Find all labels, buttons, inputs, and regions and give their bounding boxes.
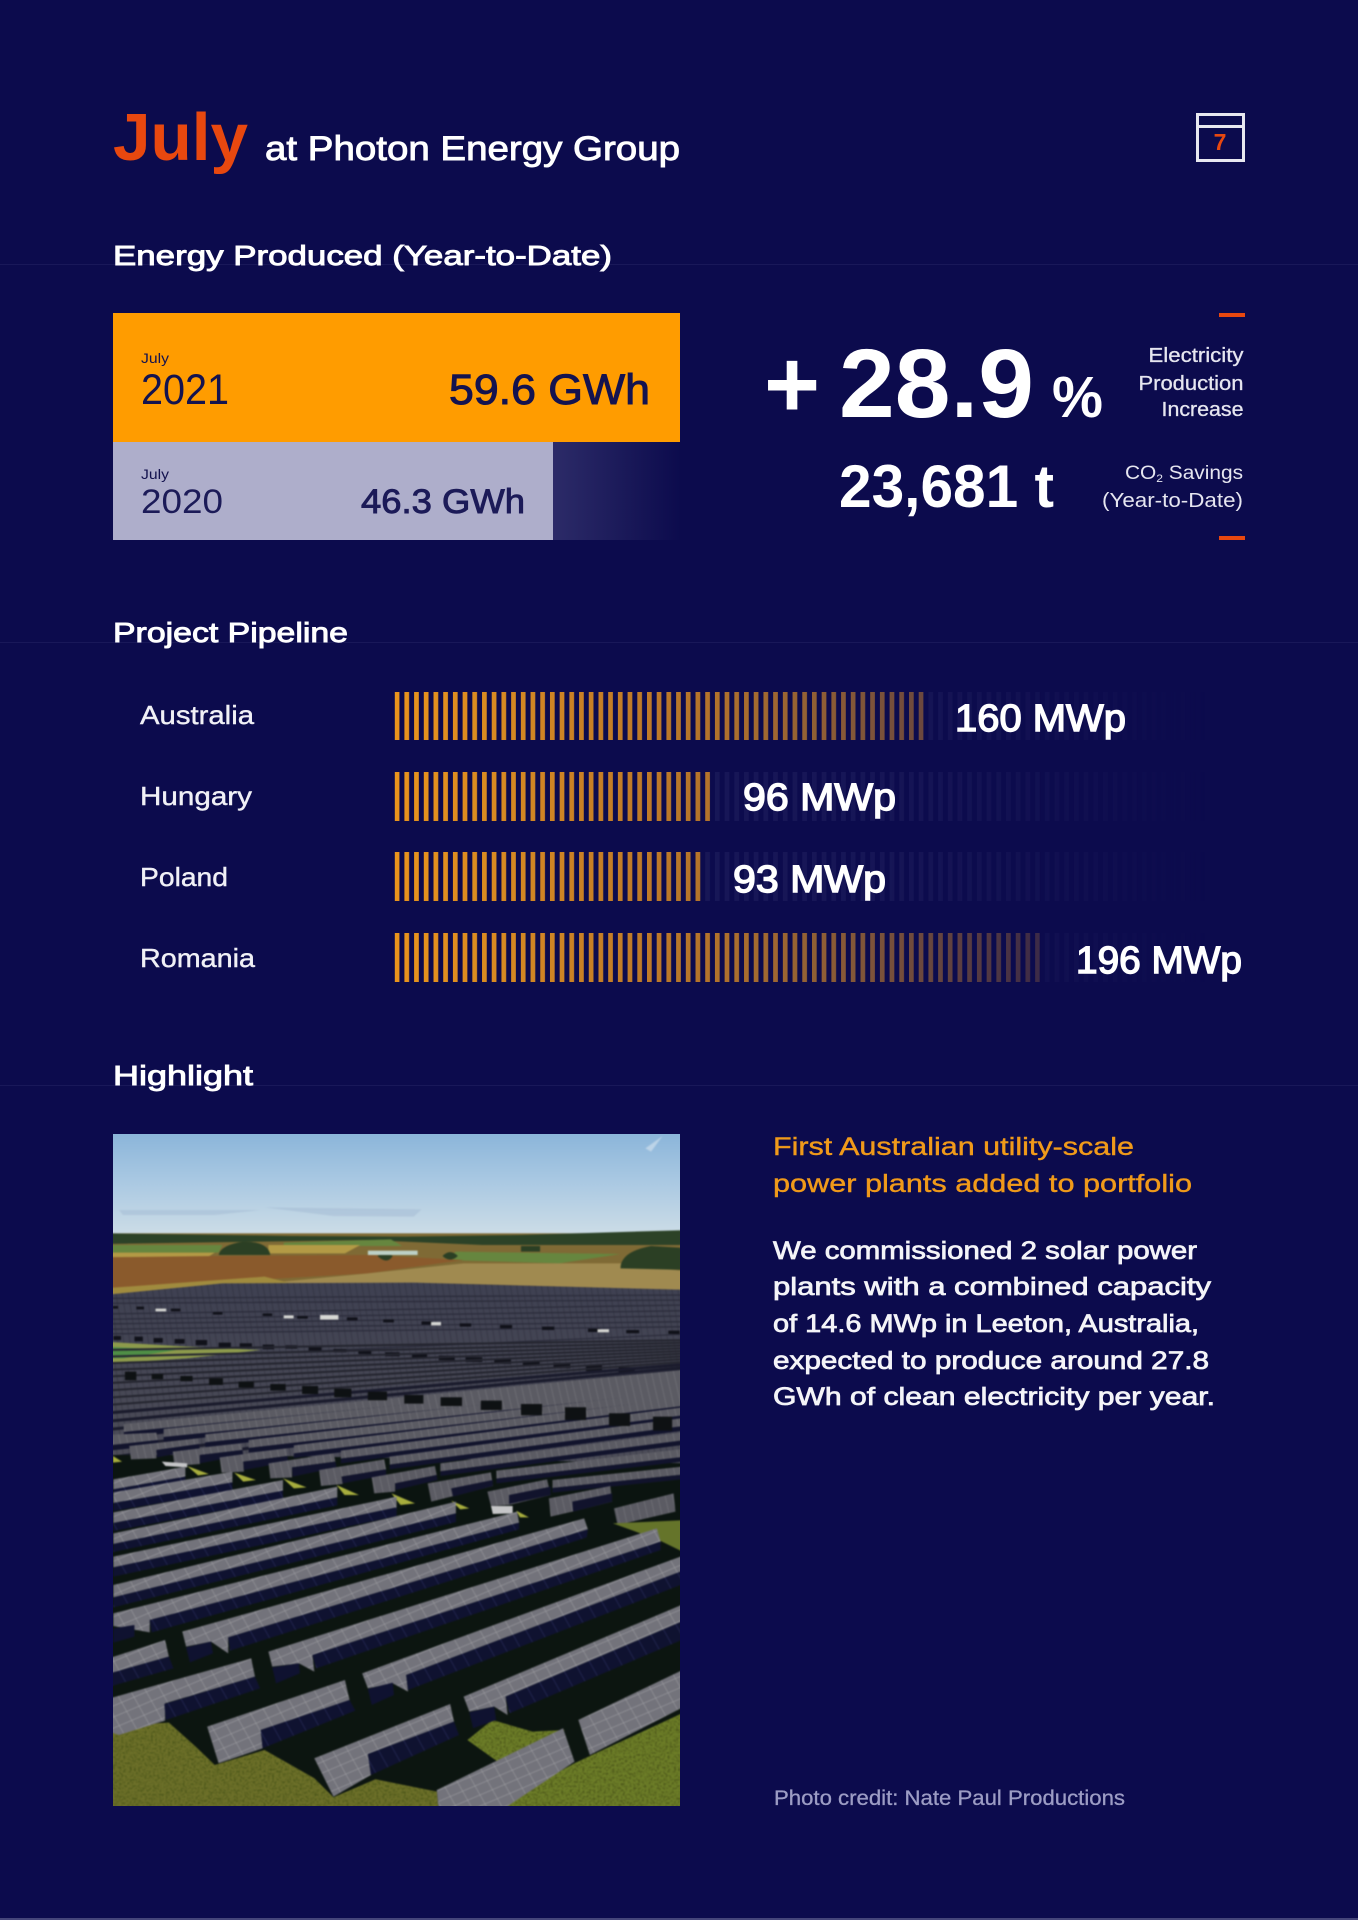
body paragraph bbox=[773, 1237, 1215, 1411]
stat: CO2 savings: (Year-to-Date) bbox=[1102, 490, 1243, 512]
panel: key statistics bbox=[764, 313, 1245, 540]
row: Poland: Poland bbox=[140, 862, 228, 892]
bar: July 2021 bbox=[113, 313, 680, 442]
stat: electricity production increase: Production bbox=[1138, 373, 1244, 395]
bar: July 2020: July bbox=[141, 466, 169, 482]
row: Poland: 93 MWp bbox=[733, 859, 886, 901]
accent dash top bbox=[1219, 313, 1245, 317]
bar: July 2020: 46.3 GWh bbox=[361, 483, 525, 521]
icon: calendar showing month 7 bbox=[1198, 114, 1244, 160]
subheading: power plants added to portfolio bbox=[773, 1170, 1192, 1198]
stat: CO2 savings: Savings bbox=[1163, 463, 1243, 484]
shadow gaps along rows bbox=[125, 1372, 672, 1431]
row: Romania bbox=[140, 933, 1242, 982]
stat: CO2 savings: CO bbox=[1125, 463, 1154, 484]
row: Poland bbox=[142, 852, 952, 901]
stat: electricity production increase bbox=[764, 329, 1244, 438]
heading: at Photon Energy Group: at Photon Energy Group bbox=[265, 130, 680, 168]
subheading bbox=[773, 1133, 1192, 1198]
heading: energy produced: Energy Produced (Year-to-Date) bbox=[113, 240, 612, 271]
mid rows bbox=[104, 1340, 689, 1405]
heading: project pipeline: Project Pipeline bbox=[113, 617, 348, 648]
row: Australia: Australia bbox=[140, 700, 255, 730]
panel tables bbox=[113, 1467, 185, 1489]
photo: aerial view of solar farm bbox=[104, 1126, 689, 1816]
heading: highlight: Highlight bbox=[113, 1060, 253, 1091]
dark row gaps bbox=[113, 1306, 680, 1373]
row: Australia bbox=[140, 692, 1210, 740]
bar: July 2020: 2020 bbox=[141, 483, 223, 521]
bar: July 2021: 59.6 GWh bbox=[449, 366, 650, 414]
middle rows with stepped ends bbox=[113, 1369, 680, 1524]
subheading: First Australian utility-scale bbox=[773, 1133, 1134, 1161]
stat: electricity production increase: 28.9 bbox=[839, 329, 1034, 438]
grass bbox=[104, 1723, 439, 1813]
foreground rows bbox=[104, 1467, 689, 1813]
row: Romania: Romania bbox=[140, 943, 256, 973]
green field patch bbox=[104, 1342, 261, 1364]
row: Romania: 196 MWp bbox=[1076, 940, 1242, 982]
stat: electricity production increase: + bbox=[764, 331, 820, 438]
row: Hungary: Hungary bbox=[140, 781, 252, 811]
far rows bbox=[104, 1295, 689, 1353]
bar: July 2020 bbox=[113, 442, 680, 540]
bar: July 2021: July bbox=[141, 350, 169, 366]
stat: electricity production increase: Increase bbox=[1162, 399, 1244, 421]
stat: electricity production increase: % bbox=[1052, 365, 1103, 430]
heading: July: July bbox=[113, 100, 248, 175]
stat: electricity production increase: Electricity bbox=[1148, 345, 1244, 367]
title bbox=[113, 100, 680, 175]
distant fields bbox=[104, 1233, 689, 1293]
panel: energy produced bbox=[113, 240, 680, 540]
body paragraph: plants with a combined capacity bbox=[773, 1273, 1212, 1301]
panel: project pipeline bbox=[113, 617, 1242, 982]
icon: calendar showing month 7: 7 bbox=[1214, 129, 1226, 155]
photo credit: Photo credit: Nate Paul Productions bbox=[774, 1787, 1125, 1810]
accent dash bottom bbox=[1219, 536, 1245, 540]
body paragraph: expected to produce around 27.8 bbox=[773, 1347, 1209, 1375]
row: Hungary: 96 MWp bbox=[743, 777, 896, 819]
body paragraph: GWh of clean electricity per year. bbox=[773, 1383, 1215, 1411]
row: Hungary bbox=[142, 772, 952, 821]
text block: highlight copy bbox=[773, 1133, 1215, 1411]
stat: CO2 savings bbox=[839, 453, 1243, 520]
row: Australia: 160 MWp bbox=[955, 698, 1126, 740]
sky bbox=[113, 1134, 680, 1234]
stat: CO2 savings: 2 bbox=[1156, 473, 1163, 485]
body paragraph: of 14.6 MWp in Leeton, Australia, bbox=[773, 1310, 1199, 1338]
bar: July 2021: 2021 bbox=[141, 366, 229, 414]
stat: CO2 savings: 23,681 t bbox=[839, 453, 1054, 520]
panel field base bbox=[113, 1282, 680, 1464]
body paragraph: We commissioned 2 solar power bbox=[773, 1237, 1197, 1265]
